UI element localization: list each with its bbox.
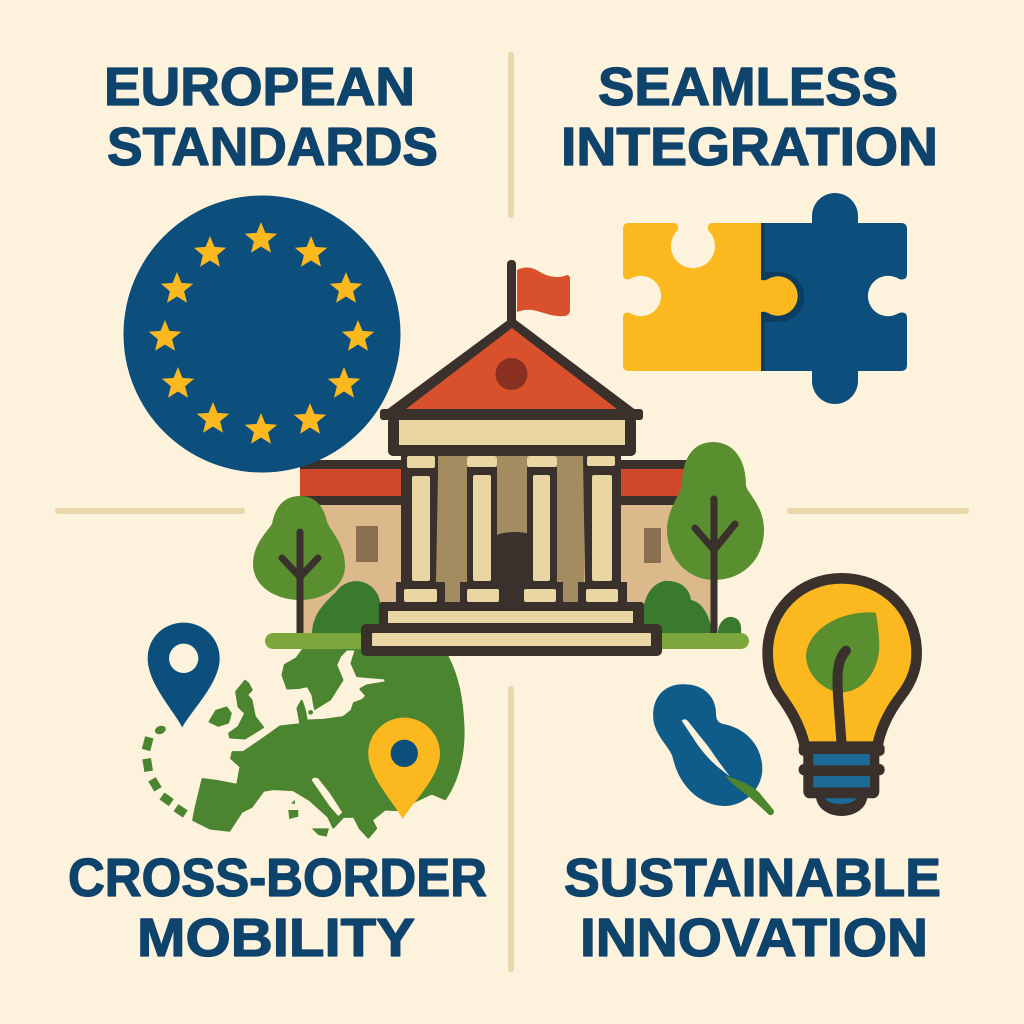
pin: yellow bbox=[368, 718, 440, 819]
flag bbox=[507, 260, 570, 324]
column 2 bbox=[460, 456, 503, 603]
leaf inside bulb bbox=[806, 612, 879, 692]
heading: Sustainable Innovation: SUSTAINABLE bbox=[564, 848, 941, 908]
heading: European Standards: EUROPEAN bbox=[104, 57, 415, 117]
pin: blue bbox=[148, 623, 220, 727]
window: left bbox=[356, 526, 378, 562]
tree: left bbox=[253, 496, 345, 634]
map: Ireland bbox=[209, 707, 231, 726]
screw base bbox=[799, 743, 885, 816]
entablature bbox=[388, 417, 636, 456]
pediment bbox=[380, 317, 643, 420]
heading: Cross-Border Mobility: CROSS-BORDER bbox=[68, 848, 487, 908]
portico back wall bbox=[436, 456, 584, 603]
route: dashed path bbox=[146, 724, 185, 814]
map: Adriatic sea bbox=[312, 778, 342, 816]
building: central portico bbox=[361, 260, 662, 656]
icon: jigsaw puzzle pieces bbox=[623, 193, 907, 404]
door bbox=[497, 532, 532, 603]
column 1 bbox=[396, 456, 445, 603]
icon: Europe map with location pins bbox=[146, 623, 463, 837]
column 4 bbox=[578, 456, 627, 603]
window: right bbox=[644, 528, 661, 563]
building: side wings bbox=[300, 460, 713, 635]
puzzle seam and tab shadow bbox=[761, 223, 804, 371]
puzzle piece: blue bbox=[761, 193, 907, 404]
heading: Cross-Border Mobility: MOBILITY bbox=[137, 908, 415, 968]
bulb glass bbox=[768, 578, 917, 747]
heading: Seamless Integration bbox=[561, 57, 938, 177]
icon: EU flag circle with twelve stars bbox=[124, 196, 400, 472]
icon: light bulb with leaf bbox=[768, 578, 917, 816]
heading: European Standards: STANDARDS bbox=[107, 117, 438, 177]
heading: Sustainable Innovation bbox=[564, 848, 941, 968]
map: Great Britain bbox=[229, 681, 263, 739]
landscaping: bushes bbox=[312, 581, 741, 633]
grass: ground strip left bbox=[265, 633, 375, 649]
grass: ground strip right bbox=[650, 633, 749, 649]
heading: Seamless Integration: INTEGRATION bbox=[561, 117, 938, 177]
column 3 bbox=[520, 456, 563, 603]
heading: Sustainable Innovation: INNOVATION bbox=[580, 908, 928, 968]
map: Mediterranean islands bbox=[288, 710, 329, 837]
tree: right bbox=[667, 442, 764, 633]
puzzle piece: yellow bbox=[623, 223, 798, 371]
heading: Cross-Border Mobility bbox=[68, 848, 487, 968]
map: mainland Europe bbox=[193, 633, 463, 837]
icon: leaf-shaped blue petal bbox=[653, 684, 774, 815]
steps bbox=[361, 602, 662, 656]
heading: European Standards bbox=[104, 57, 438, 177]
stem bbox=[837, 651, 846, 745]
heading: Seamless Integration: SEAMLESS bbox=[598, 57, 898, 117]
